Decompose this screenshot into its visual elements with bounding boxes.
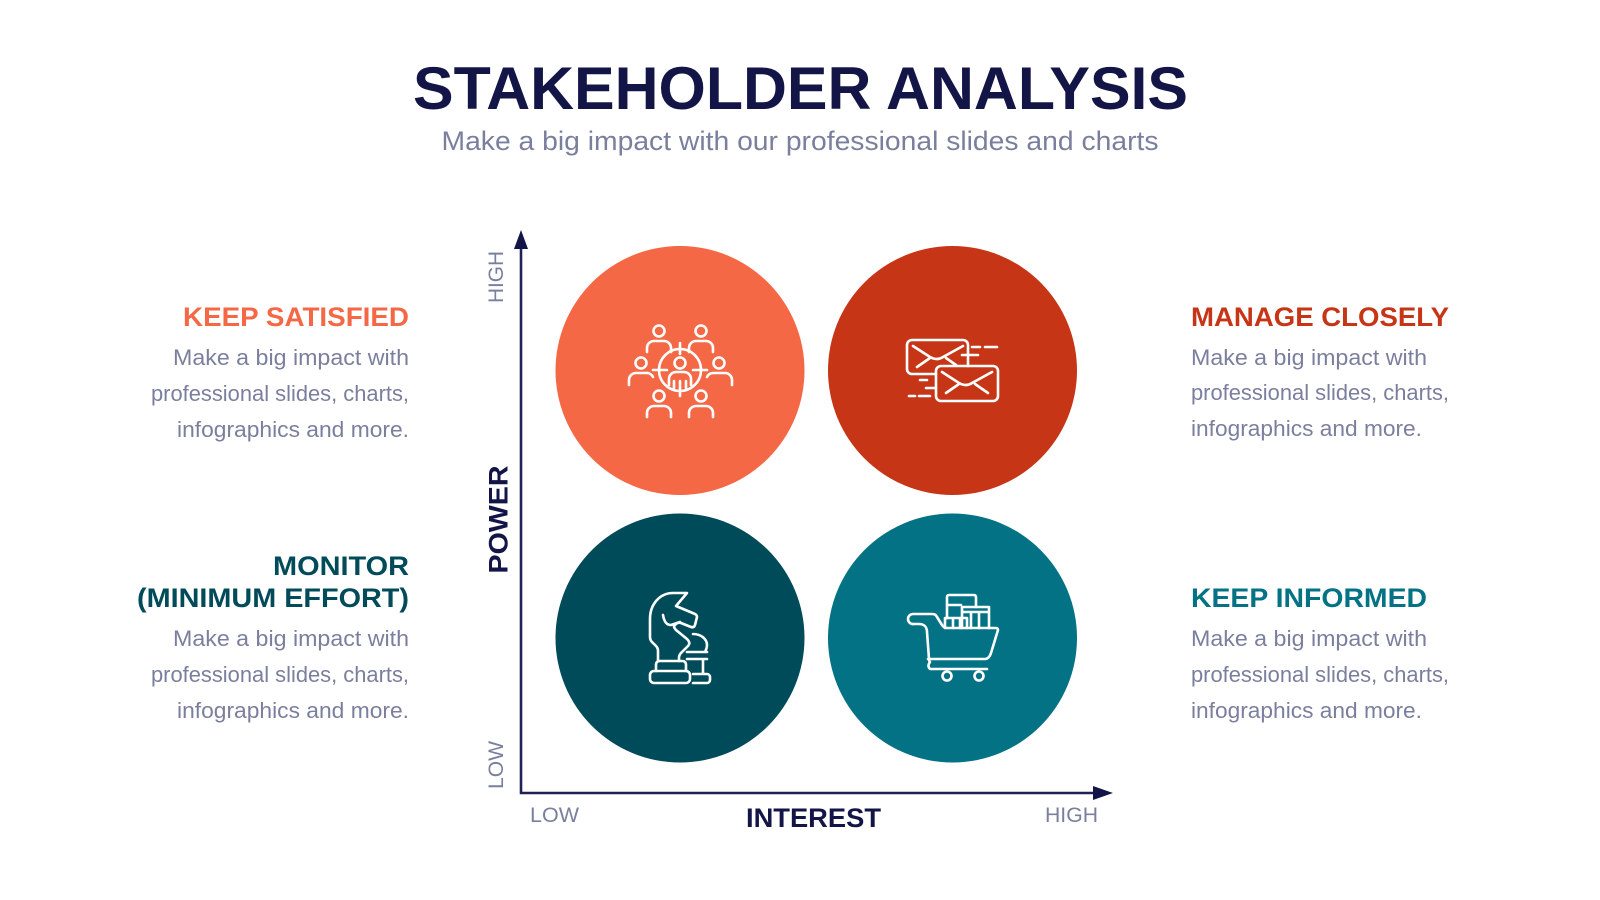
- text block: monitor description: [151, 626, 409, 723]
- circle: keep satisfied: [556, 246, 804, 495]
- title: STAKEHOLDER ANALYSIS: [413, 55, 1188, 122]
- circle: monitor: [556, 514, 804, 762]
- icon: flying envelopes: [907, 340, 998, 401]
- axis tick: interest high: HIGH: [1045, 804, 1098, 827]
- panel: keep satisfied text: [151, 302, 409, 442]
- text block: manage closely description: Make a big impact with: [1191, 345, 1427, 370]
- arrow: interest axis: [1093, 786, 1113, 800]
- axis label: power: POWER: [484, 466, 514, 574]
- text block: monitor description: Make a big impact with: [173, 626, 409, 651]
- panel: keep informed text: [1191, 583, 1449, 723]
- heading: monitor: [137, 551, 409, 613]
- panel: monitor text: [137, 551, 409, 723]
- text block: keep informed description: [1191, 626, 1449, 723]
- circle: manage closely: [828, 246, 1077, 495]
- circle: keep informed: [828, 514, 1077, 762]
- heading: manage closely: MANAGE CLOSELY: [1191, 302, 1449, 332]
- arrow: power axis: [514, 230, 528, 249]
- text block: manage closely description: [1191, 345, 1449, 441]
- text block: keep satisfied description: Make a big impact with: [173, 345, 409, 370]
- chart axes: [514, 230, 1113, 800]
- subtitle: Make a big impact with our professional slides and charts: [442, 126, 1158, 156]
- heading: monitor: MONITOR: [273, 551, 409, 581]
- axis tick: power high: HIGH: [485, 251, 508, 303]
- text block: keep informed description: professional slides, charts,: [1191, 662, 1449, 687]
- axis line: power: [521, 245, 1097, 793]
- heading: keep informed: KEEP INFORMED: [1191, 583, 1427, 613]
- icon: chess knight and pawn: [650, 593, 710, 683]
- text block: monitor description: infographics and more.: [177, 698, 409, 723]
- panel: manage closely text: [1191, 302, 1449, 441]
- text block: keep informed description: infographics and more.: [1191, 698, 1422, 723]
- text block: manage closely description: infographics and more.: [1191, 416, 1422, 441]
- text block: monitor description: professional slides, charts,: [151, 662, 409, 687]
- text block: keep satisfied description: [151, 345, 409, 442]
- text block: keep informed description: Make a big impact with: [1191, 626, 1427, 651]
- axis tick: interest low: LOW: [530, 804, 579, 827]
- axis tick: power low: LOW: [485, 741, 508, 789]
- text block: manage closely description: professional slides, charts,: [1191, 380, 1449, 405]
- heading: keep satisfied: KEEP SATISFIED: [183, 302, 409, 332]
- text block: keep satisfied description: professional slides, charts,: [151, 381, 409, 406]
- heading: monitor: (MINIMUM EFFORT): [137, 583, 409, 613]
- axis label: interest: INTEREST: [746, 803, 882, 833]
- icon: shopping cart: [908, 595, 998, 680]
- icon: target on people: [629, 326, 732, 417]
- text block: keep satisfied description: infographics and more.: [177, 417, 409, 442]
